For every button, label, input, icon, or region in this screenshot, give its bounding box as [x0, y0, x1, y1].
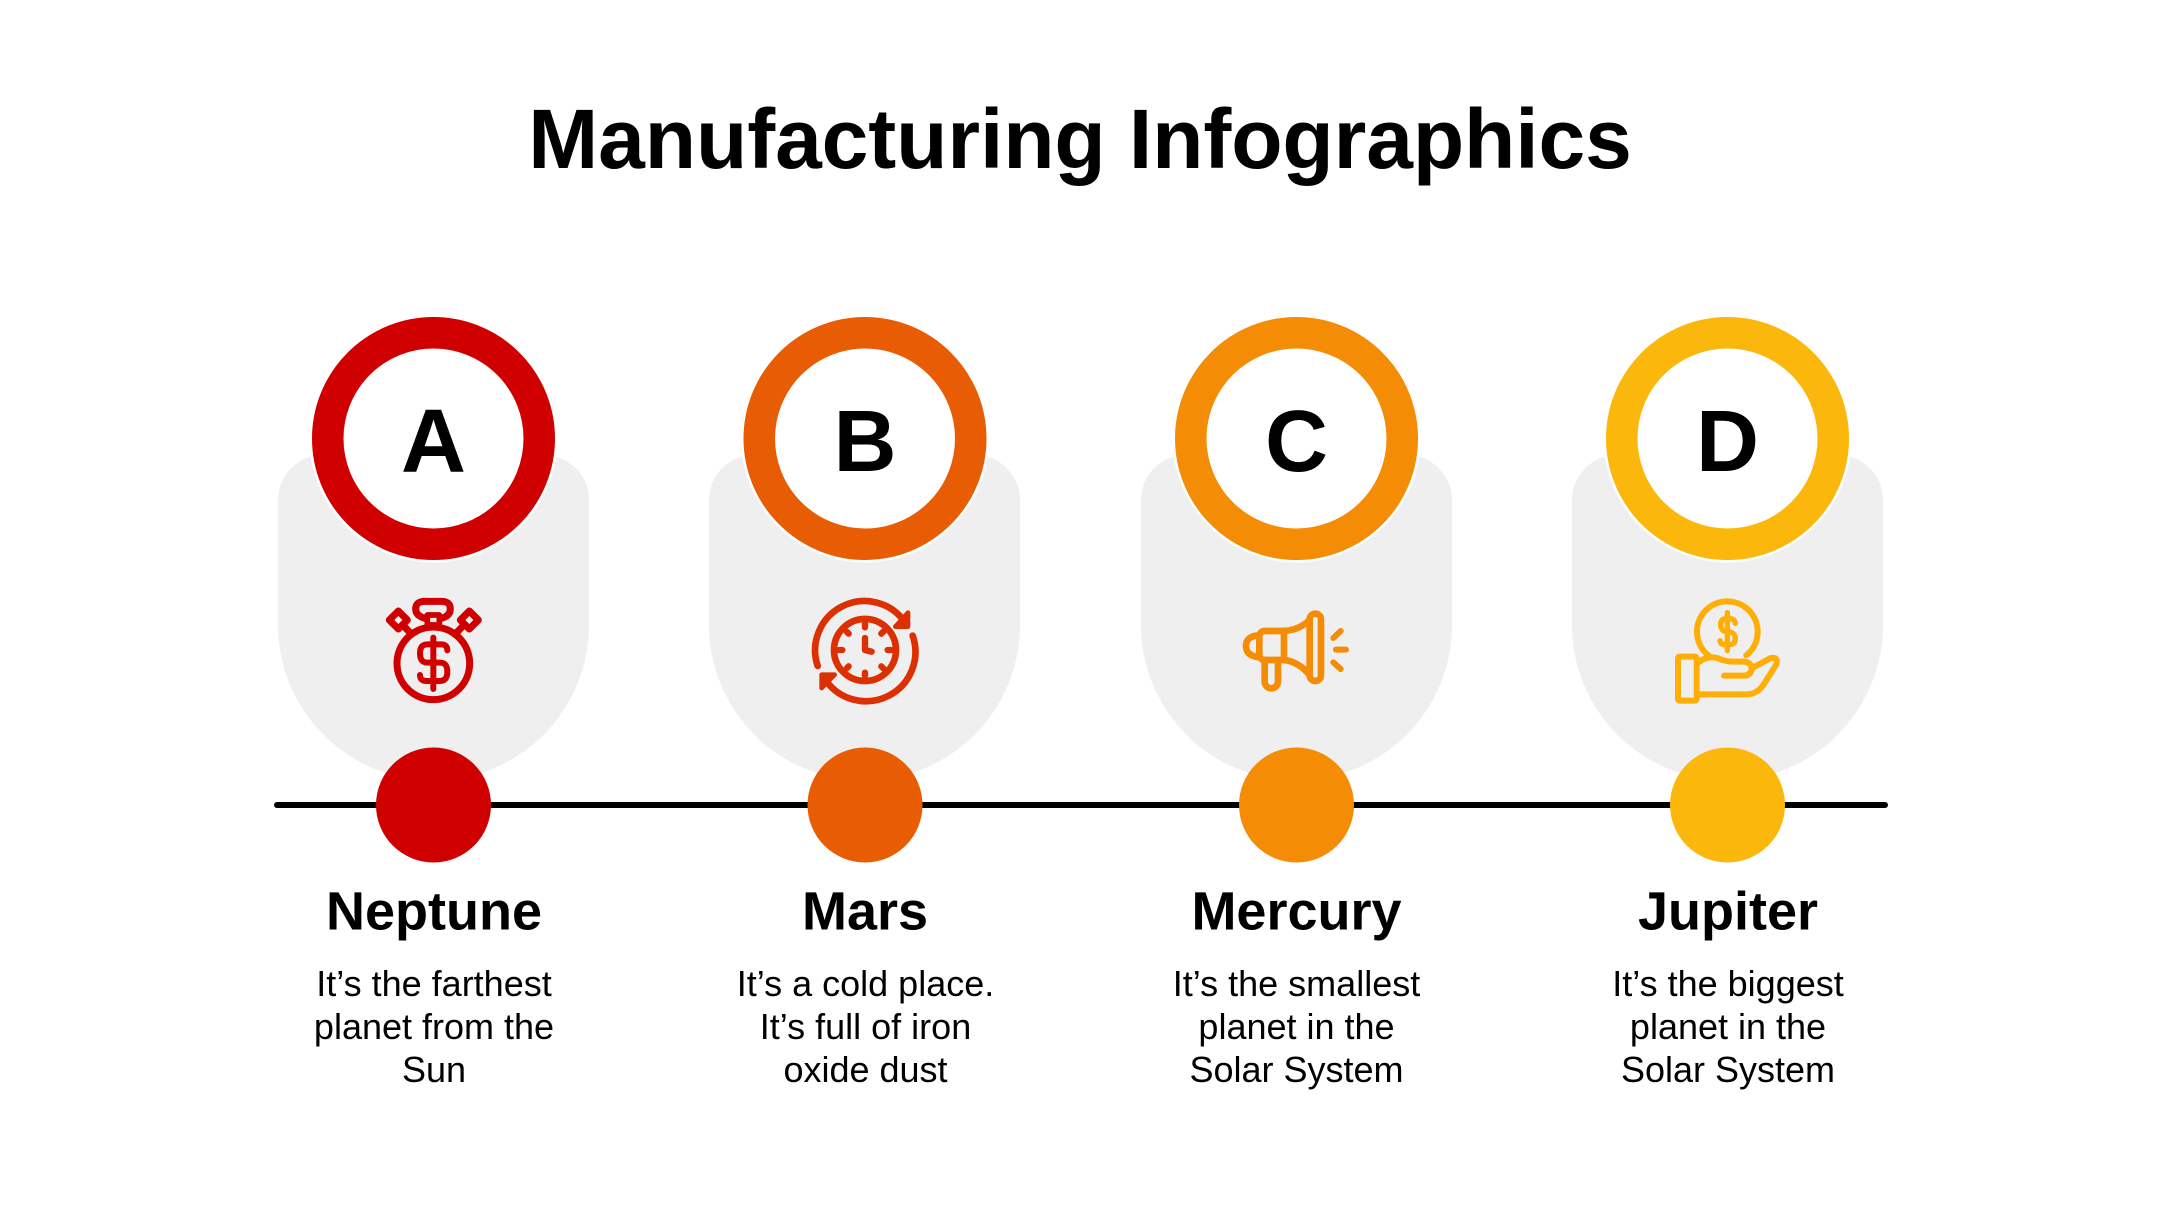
icon: hand holding coin	[1678, 601, 1777, 701]
node dot C	[1239, 748, 1354, 862]
icon: megaphone	[1246, 614, 1346, 688]
badge D: D	[1696, 393, 1759, 490]
badge A: A	[401, 392, 466, 492]
text: Mars description: oxide dust	[783, 1049, 948, 1090]
text: Mars description: It’s full of iron	[760, 1006, 971, 1047]
text: Mars description: It’s a cold place.	[737, 963, 994, 1004]
badge A	[310, 314, 558, 562]
node dot B	[808, 748, 922, 862]
text: Mercury description: It’s the smallest	[1173, 963, 1420, 1004]
node dot A	[376, 748, 491, 862]
text: Neptune description: Sun	[402, 1049, 466, 1090]
badge C: C	[1265, 393, 1328, 490]
icon: stopwatch with dollar	[389, 601, 478, 700]
badge B: B	[834, 393, 896, 490]
badge D	[1604, 314, 1852, 562]
badge C	[1172, 314, 1420, 562]
text: Jupiter description: It’s the biggest	[1612, 963, 1844, 1004]
text: Neptune description: planet from the	[314, 1006, 554, 1047]
text: Jupiter description: planet in the	[1630, 1006, 1826, 1047]
panel: B background	[709, 455, 1020, 780]
text: Jupiter description: Solar System	[1621, 1049, 1835, 1090]
text: Neptune description: It’s the farthest	[316, 963, 552, 1004]
timeline line	[277, 802, 1885, 808]
panel: A background	[278, 455, 589, 780]
node dot D	[1670, 748, 1785, 862]
text: Mercury description: planet in the	[1198, 1006, 1395, 1047]
heading: Mercury: Mercury	[1191, 882, 1402, 942]
panel: C background	[1141, 455, 1452, 780]
heading: Mars: Mars	[802, 882, 928, 942]
title: Manufacturing Infographics	[528, 92, 1632, 186]
icon: clock with circular arrows	[815, 601, 915, 701]
text: Mercury description: Solar System	[1189, 1049, 1404, 1090]
badge B	[741, 314, 989, 562]
panel: D background	[1572, 455, 1883, 780]
heading: Neptune: Neptune	[326, 882, 542, 942]
heading: Jupiter: Jupiter	[1638, 882, 1818, 942]
